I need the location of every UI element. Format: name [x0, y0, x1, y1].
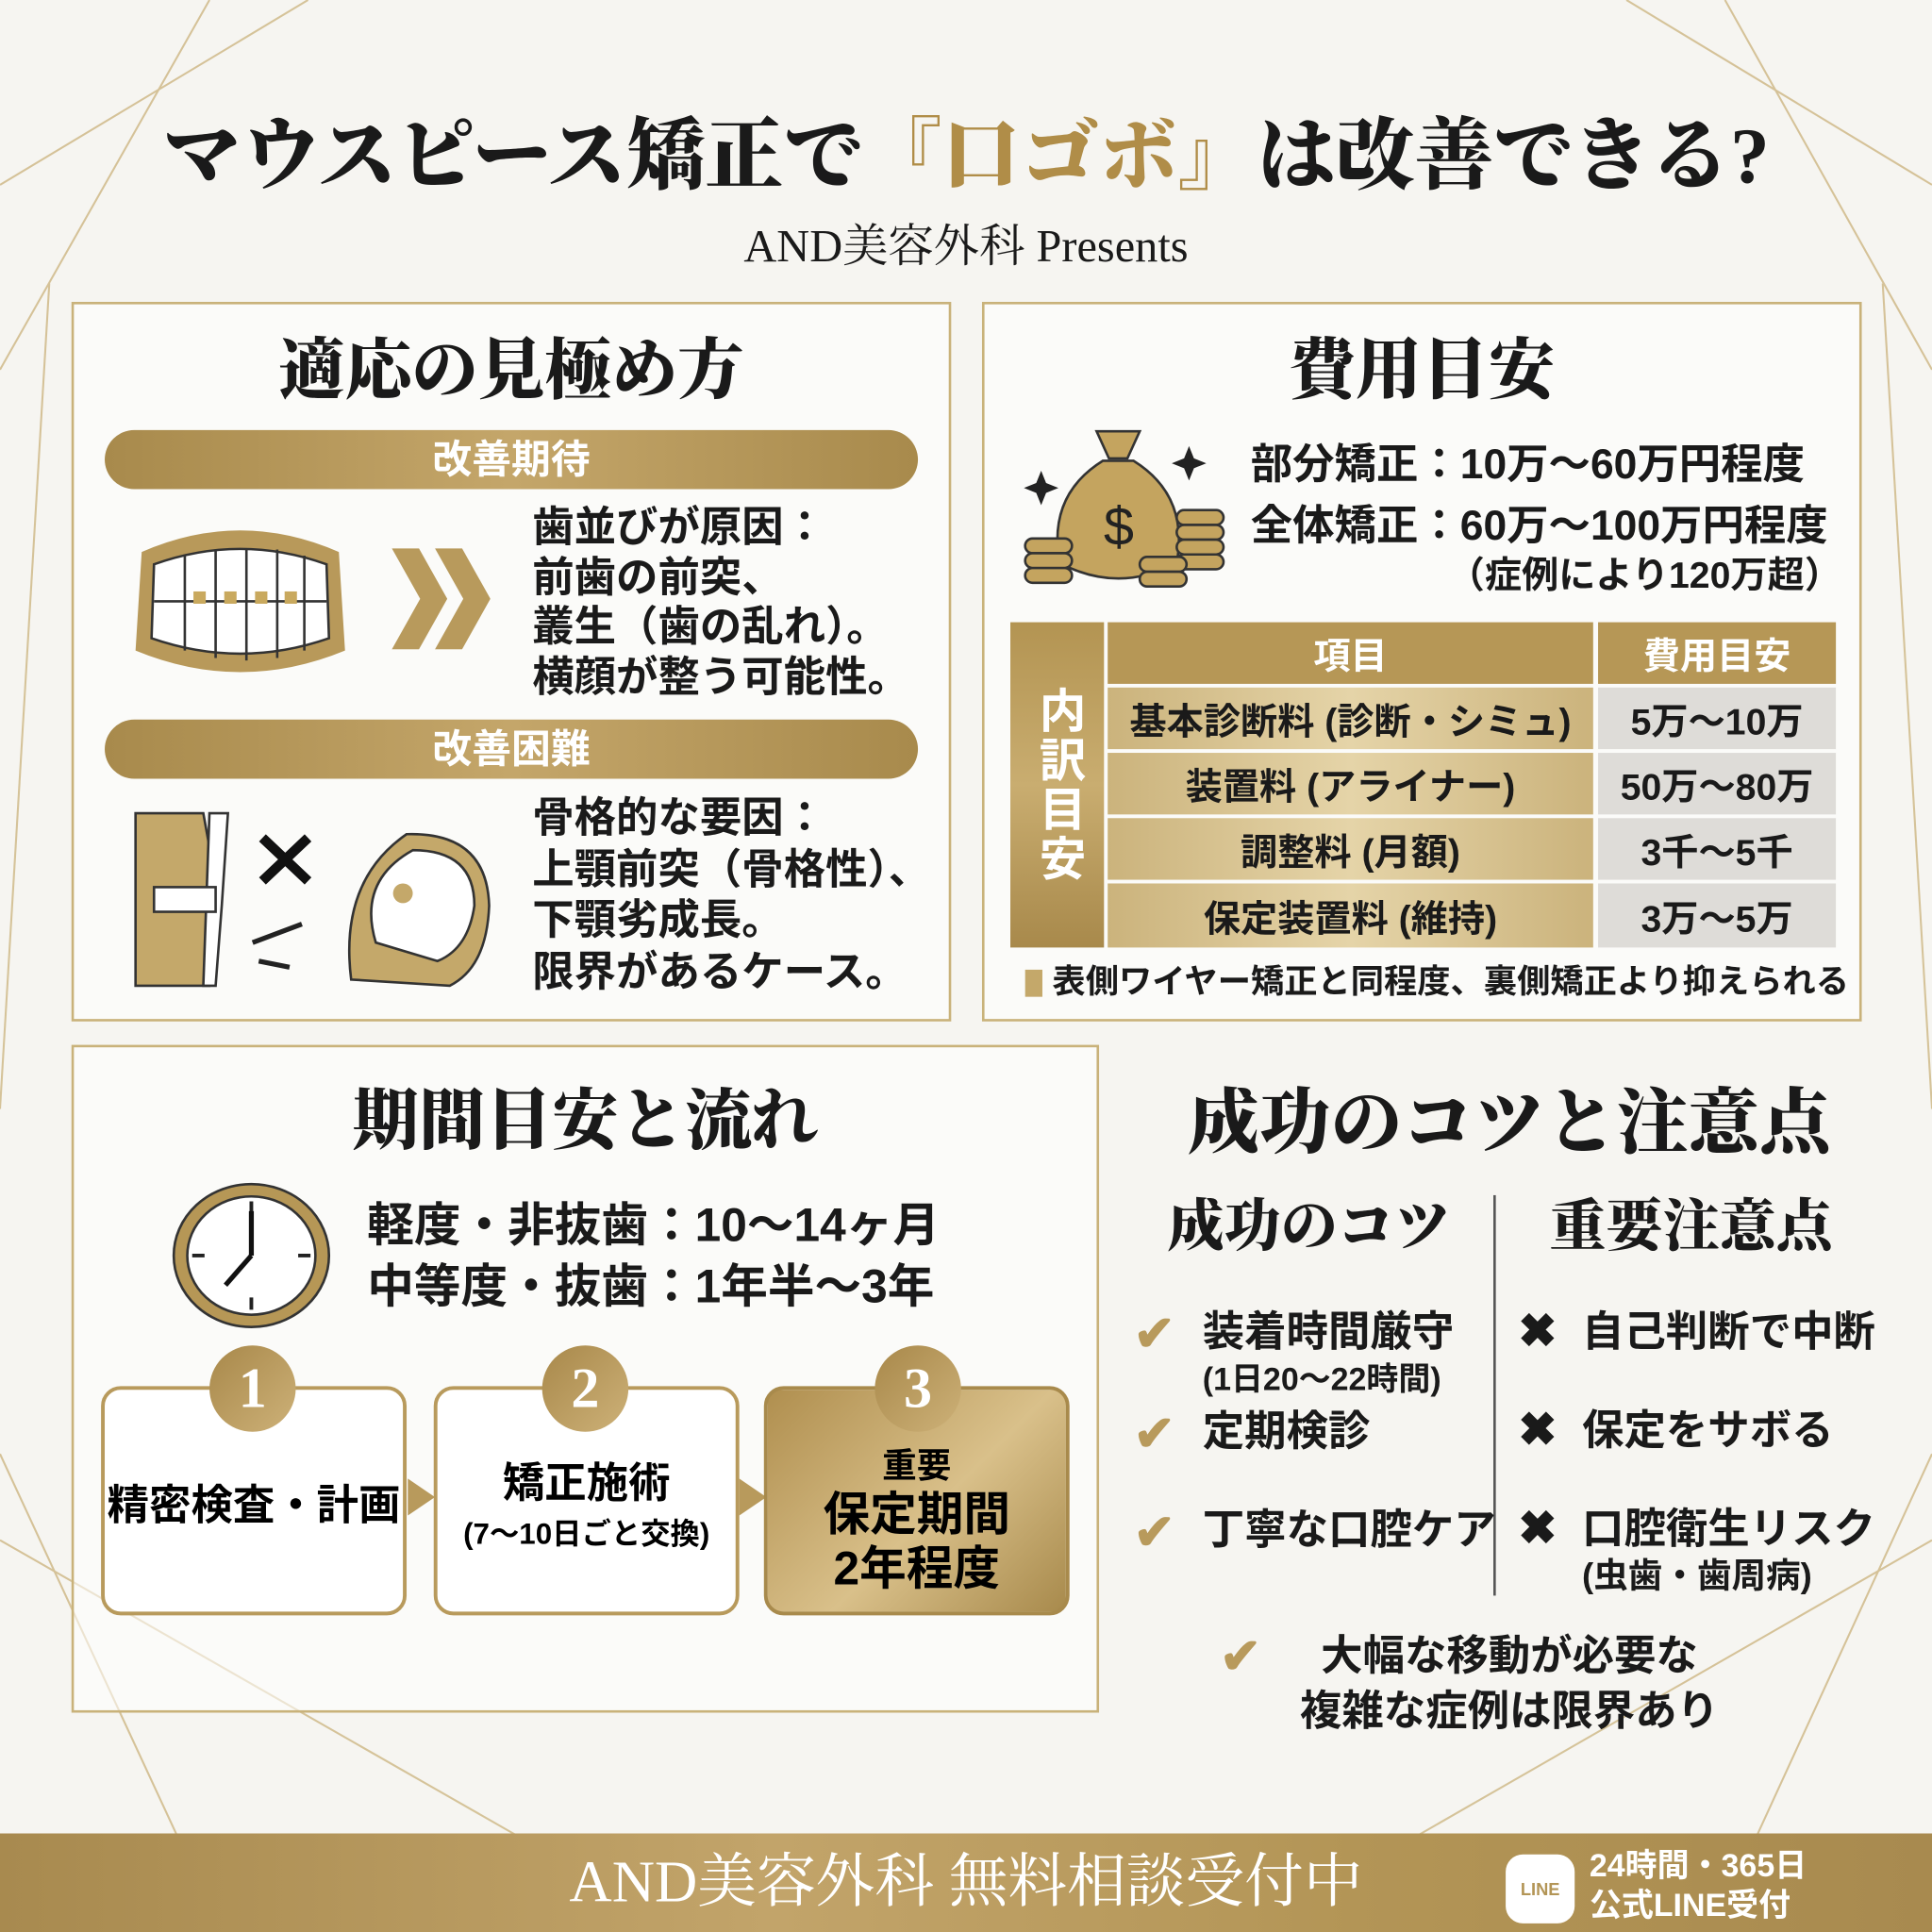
list: cautions: 口腔衛生リスク: [1582, 1506, 1875, 1553]
text: 歯並び: 前歯の前突、: [532, 554, 784, 601]
list: cautions: ✖: [1518, 1405, 1557, 1457]
subheading: 成功のコツ: 成功のコツ: [1168, 1195, 1451, 1258]
text: durations: 中等度・抜歯：1年半〜3年: [367, 1261, 934, 1313]
pill: 改善期待: [105, 430, 918, 490]
icon: skeletal: [134, 811, 491, 987]
panel: 成功のコツと注意点: [1134, 1083, 1875, 1735]
step 1: [101, 1386, 407, 1615]
table: 内訳目安: 基本診断料 (診断・シミュ): [1129, 702, 1572, 743]
table: 内訳目安: 項目: [1313, 637, 1388, 677]
text: cost summary: [1251, 441, 1841, 596]
table: 内訳目安: 保定装置料 (維持): [1204, 899, 1497, 941]
step 2: [434, 1386, 740, 1615]
step 3: 2年程度: [833, 1544, 1000, 1595]
list: tips: 装着時間厳守: [1203, 1308, 1454, 1356]
table: 内訳目安: 装置料 (アライナー): [1186, 768, 1515, 808]
list: cautions: (虫歯・歯周病): [1582, 1557, 1812, 1594]
footer LINE text: 24時間・365日: [1590, 1847, 1807, 1884]
pill: 改善困難: 改善困難: [432, 727, 591, 772]
list: cautions: ✖: [1518, 1306, 1557, 1357]
heading: 費用目安: 費用目安: [1289, 334, 1555, 408]
list: tips: [1134, 1307, 1496, 1560]
footer LINE text: [1590, 1847, 1807, 1924]
icon: money bag: [1024, 430, 1224, 588]
table: 内訳目安: 3千〜5千: [1641, 833, 1793, 874]
list: tips: 定期検診: [1203, 1408, 1370, 1456]
table: 内訳目安: 5万〜10万: [1631, 702, 1804, 743]
text: 骨格: 下顎劣成長。: [532, 897, 784, 943]
heading: 適応: 適応の見極め方: [278, 334, 744, 408]
note: limits: [1220, 1630, 1719, 1735]
table: 内訳目安: 内訳目安: [1031, 687, 1083, 883]
text: cost summary: （症例により120万超）: [1448, 556, 1841, 596]
list: tips: 丁寧な口腔ケア: [1203, 1507, 1496, 1554]
title: マウスピース矯正で『口ゴボ』は改善できる?: [162, 112, 1770, 200]
icon: teeth with braces: [136, 530, 345, 672]
step 1: 精密検査・計画: [108, 1482, 400, 1528]
list: cautions: 保定をサボる: [1582, 1407, 1834, 1454]
icon: LINE: LINE: [1521, 1879, 1559, 1899]
text: 骨格: 上顎前突（骨格性）、: [532, 846, 930, 892]
step 2: 矯正施術: [503, 1460, 671, 1507]
footnote: 表側ワイヤー矯正と同程度、裏側矯正より抑えられる: [1052, 963, 1849, 1001]
list: cautions: [1518, 1306, 1875, 1594]
footer band: [0, 1834, 1932, 1932]
table: 内訳目安: 50万〜80万: [1621, 768, 1813, 808]
panel: 費用目安: [982, 302, 1862, 1022]
note: limits: 複雑な症例は限界あり: [1300, 1688, 1719, 1735]
subtitle: AND美容外科 Presents: [743, 222, 1189, 273]
text: cost summary: 全体矯正：60万〜100万円程度: [1251, 503, 1828, 550]
footer LINE text: 公式LINE受付: [1590, 1887, 1790, 1924]
text: 歯並び: 叢生（歯の乱れ）。: [532, 604, 889, 651]
list: tips: ✔: [1134, 1407, 1174, 1461]
text: durations: [367, 1200, 940, 1313]
list: tips: ✔: [1134, 1307, 1174, 1361]
table: 内訳目安: 費用目安: [1643, 637, 1790, 677]
text: durations: 軽度・非抜歯：10〜14ヶ月: [367, 1200, 940, 1252]
step 2: (7〜10日ごと交換): [463, 1518, 709, 1551]
icon: LINE: [1506, 1855, 1574, 1924]
arrow 1: [408, 1478, 435, 1516]
list: tips: ✔: [1134, 1506, 1174, 1560]
icon: money bag: $: [1104, 496, 1134, 557]
icon: chevrons: [392, 548, 491, 649]
step 3: 重要: [882, 1446, 951, 1485]
list: cautions: ✖: [1518, 1503, 1557, 1555]
list: tips: (1日20〜22時間): [1203, 1360, 1441, 1397]
text: 1: [239, 1357, 267, 1420]
text: 骨格: 限界があるケース。: [532, 948, 908, 995]
text: 骨格: 骨格的な要因：: [532, 794, 825, 841]
text: 2: [571, 1357, 599, 1420]
table: 内訳目安: 調整料 (月額): [1241, 833, 1460, 874]
text: 3: [904, 1357, 932, 1420]
text: 歯並び: [532, 504, 909, 701]
icon: clock: [172, 1183, 330, 1328]
step 3: 保定期間: [823, 1490, 1010, 1541]
pill: 改善困難: [105, 720, 918, 778]
pill: 改善期待: 改善期待: [432, 438, 591, 482]
text: 骨格: [532, 794, 930, 995]
list: cautions: 自己判断で中断: [1582, 1308, 1875, 1356]
footer text: AND美容外科 無料相談受付中: [569, 1849, 1363, 1915]
panel: 期間目安と流れ: [72, 1045, 1099, 1713]
heading: 成功: 成功のコツと注意点: [1188, 1083, 1831, 1163]
arrow 2: [740, 1478, 766, 1516]
panel: 適応の見極め方: [72, 302, 951, 1022]
text: cost summary: 部分矯正：10万〜60万円程度: [1251, 441, 1805, 488]
note: limits: 大幅な移動が必要な: [1321, 1633, 1698, 1679]
table: 内訳目安: [1010, 623, 1836, 947]
heading: 期間: 期間目安と流れ: [353, 1084, 818, 1158]
note: limits: ✔: [1220, 1630, 1261, 1684]
table: 内訳目安: 3万〜5万: [1641, 899, 1793, 941]
step 3: [764, 1386, 1070, 1615]
text: 歯並び: 横顔が整う可能性。: [532, 654, 909, 701]
subheading: 重要注意点: 重要注意点: [1549, 1195, 1833, 1258]
text: 歯並び: 歯並びが原因：: [532, 504, 825, 551]
